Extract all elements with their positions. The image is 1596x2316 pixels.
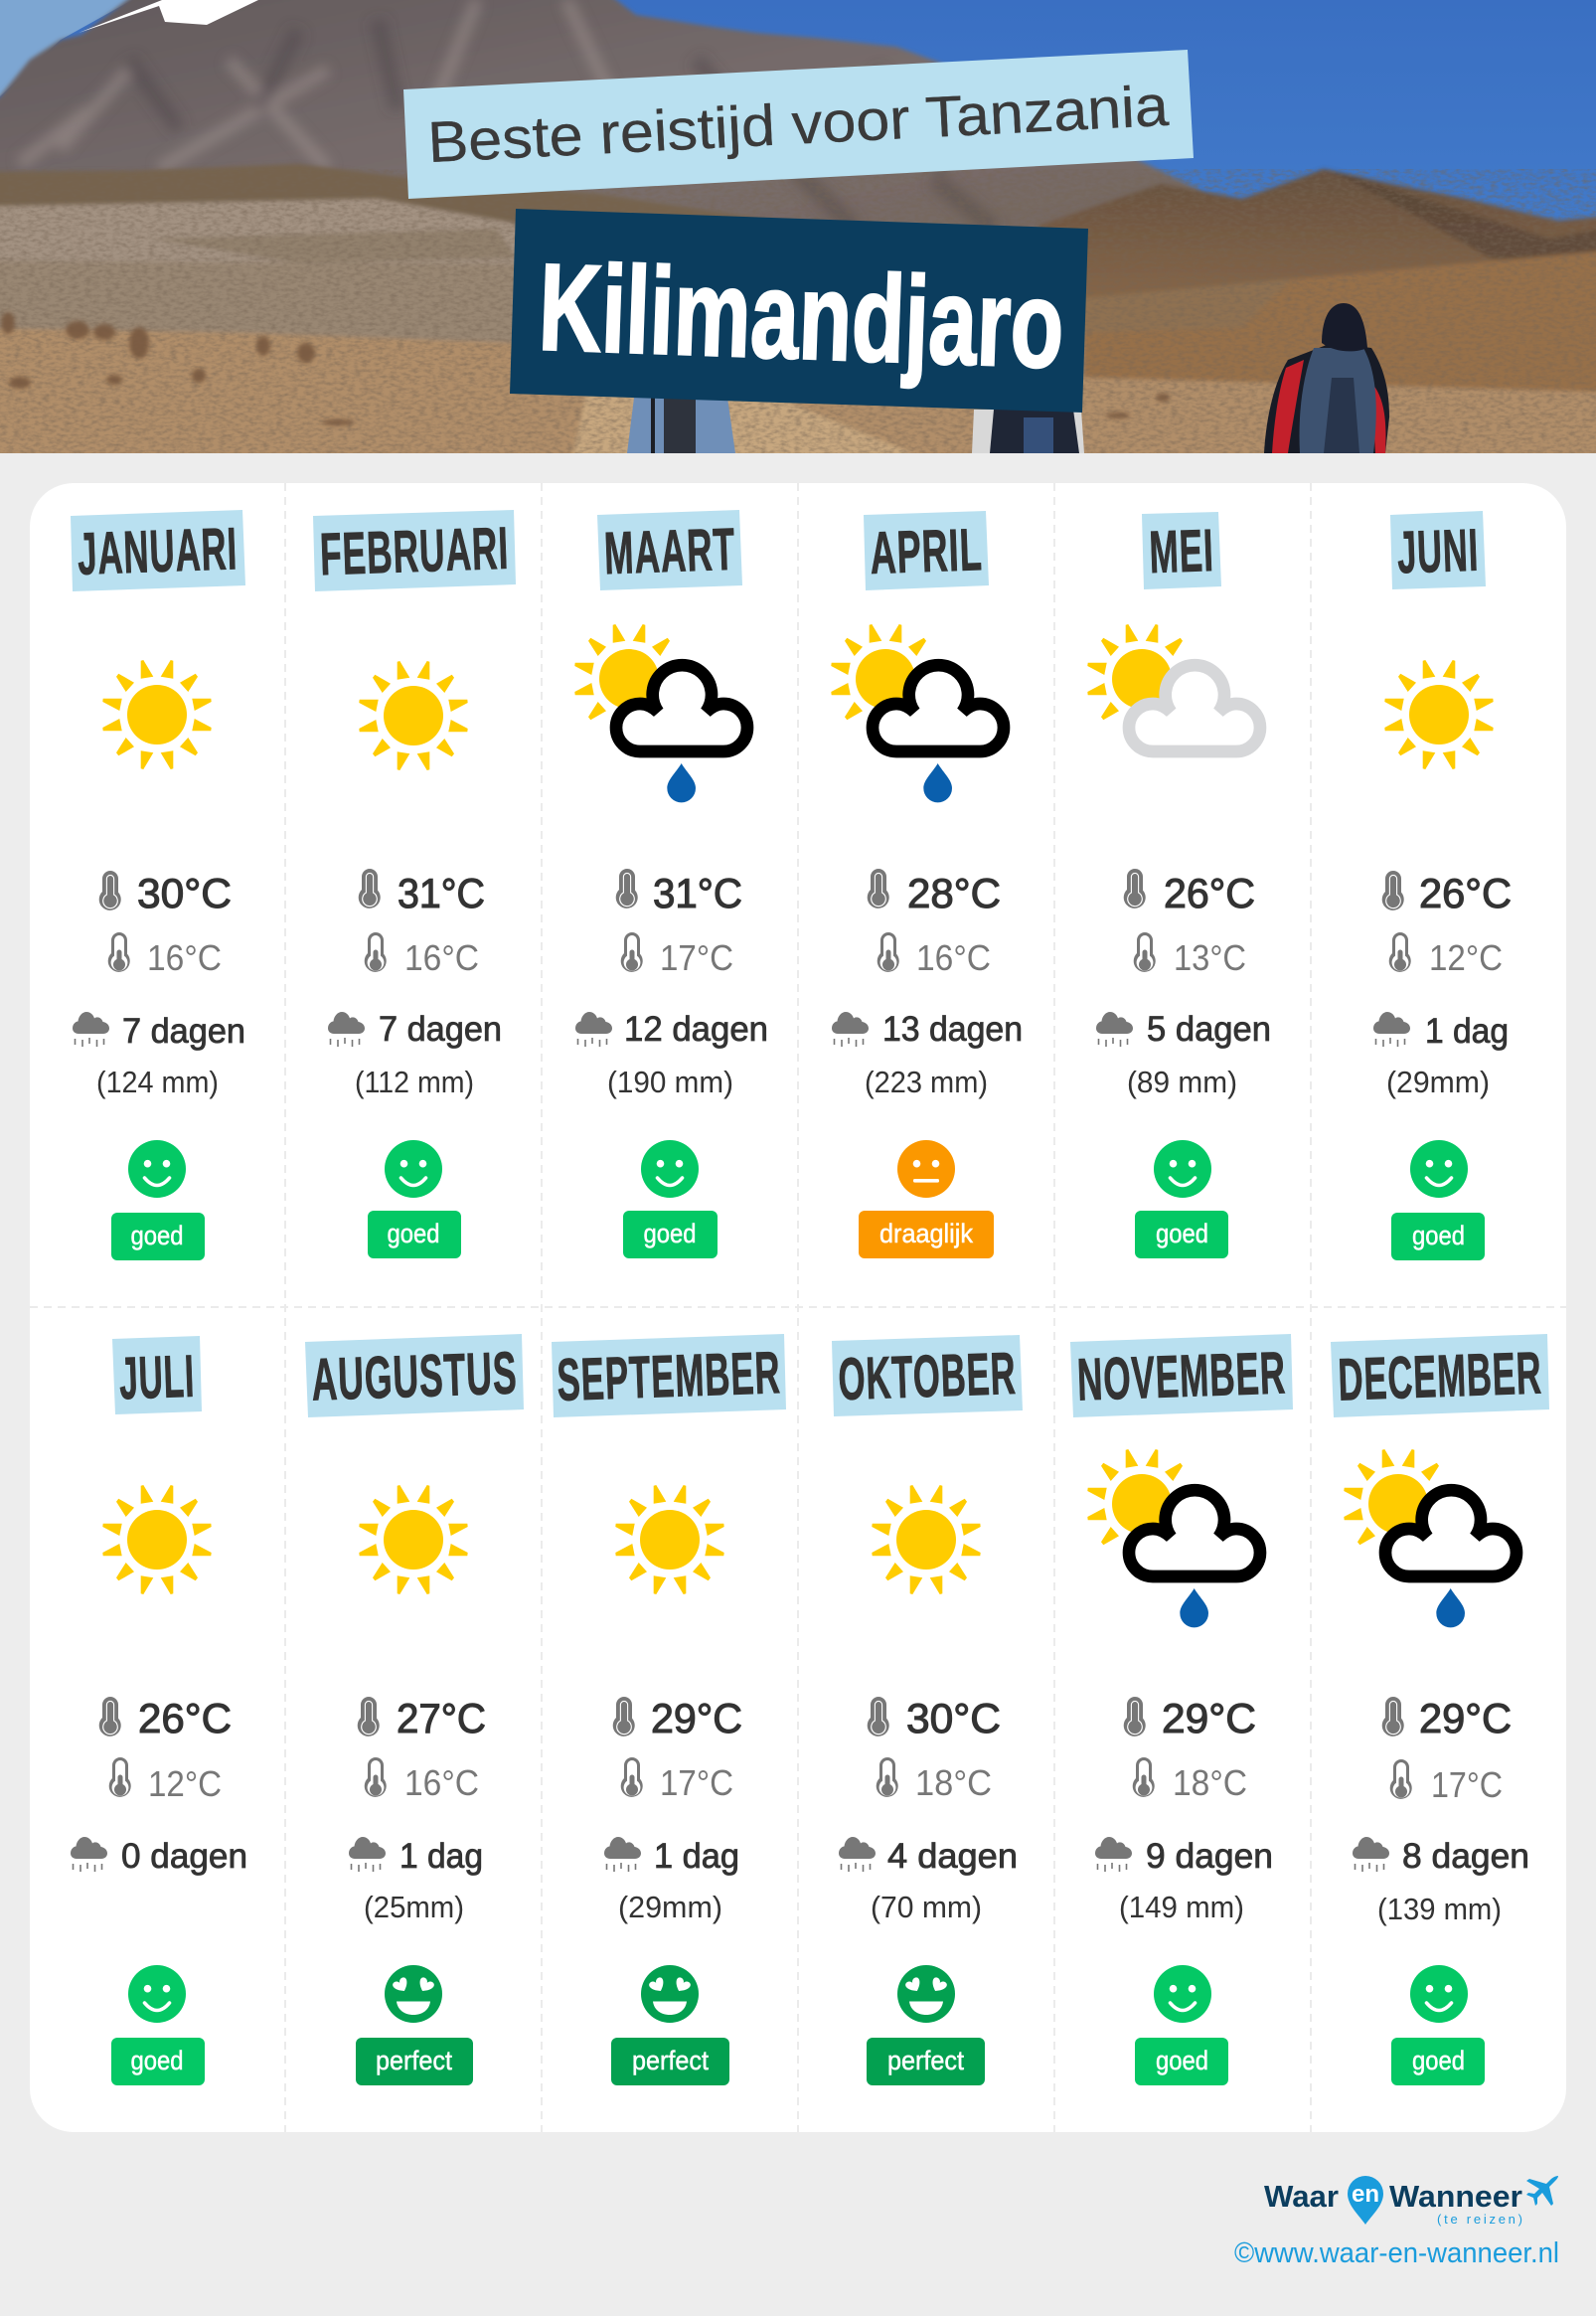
rain days: 9 dagen	[1146, 1837, 1273, 1876]
icon: airplane	[1526, 2176, 1558, 2206]
rain days: 1 dag	[1425, 1012, 1509, 1051]
panel: oktober	[832, 1335, 1023, 2085]
rainfall amount: (70 mm)	[871, 1890, 982, 1924]
month heading: februari	[313, 510, 516, 591]
max temperature: 30°C	[137, 870, 232, 916]
rating badge	[111, 1213, 205, 1260]
rating badge: perfect	[376, 2046, 452, 2075]
month heading: november	[1070, 1334, 1293, 1417]
title banner: Kilimandjaro	[510, 209, 1088, 413]
rating badge: perfect	[632, 2046, 709, 2075]
max temperature: 29°C	[1419, 1695, 1512, 1741]
rating smiley	[1154, 1965, 1211, 2023]
max temperature: 31°C	[398, 870, 485, 916]
rating badge	[1391, 1213, 1485, 1260]
max temperature	[358, 1695, 486, 1741]
min temperature	[621, 932, 733, 978]
min temperature: 13°C	[1174, 937, 1246, 978]
min temperature	[1134, 932, 1246, 978]
panel: maart	[574, 510, 768, 1258]
min temperature: 12°C	[1429, 937, 1503, 978]
rainfall amount: (223 mm)	[865, 1065, 988, 1099]
rain days: 5 dagen	[1147, 1010, 1271, 1049]
max temperature	[359, 869, 485, 916]
weather icon: sun, cloud and rain	[1344, 1449, 1516, 1627]
icon: map pin with en	[1348, 2176, 1383, 2225]
weather icon: sun, cloud and rain	[1087, 1449, 1260, 1627]
min temperature	[1390, 1759, 1503, 1805]
weather icon: sun, cloud and rain	[574, 624, 747, 802]
rain days: 0 dagen	[121, 1837, 247, 1876]
max temperature	[868, 869, 1001, 916]
rating smiley	[897, 1965, 955, 2023]
rain days: 1 dag	[399, 1837, 483, 1876]
month heading: april	[864, 511, 989, 590]
min temperature	[1389, 932, 1503, 978]
month heading: mei: MEI	[1148, 517, 1215, 585]
max temperature: 29°C	[651, 1695, 742, 1741]
weather icon: sun	[102, 1485, 212, 1594]
min temperature	[878, 932, 991, 978]
min temperature: 12°C	[148, 1763, 222, 1804]
max temperature	[616, 869, 742, 916]
max temperature: 27°C	[397, 1695, 486, 1741]
rating badge	[867, 2038, 985, 2085]
rating badge: goed	[1412, 1221, 1465, 1250]
month heading: juli	[112, 1336, 202, 1414]
rain days: 7 dagen	[379, 1010, 502, 1049]
hiker left under title	[627, 398, 735, 453]
hero photo: Kilimanjaro landscape	[0, 0, 1596, 487]
logo: Waar en Wanneer: (te reizen)	[1437, 2212, 1522, 2227]
hiker right with backpack	[1264, 303, 1389, 453]
month heading: maart: MAART	[603, 516, 736, 586]
rain days: 7 dagen	[122, 1012, 245, 1051]
panel: calendar card	[30, 483, 1566, 2132]
max temperature: 26°C	[1419, 870, 1512, 916]
panel: mei	[1087, 512, 1271, 1258]
panel: februari	[313, 510, 516, 1258]
title banner: Kilimandjaro: Kilimandjaro	[537, 239, 1066, 395]
rating smiley	[128, 1965, 186, 2023]
icon: map pin with en: en	[1352, 2181, 1379, 2208]
weather icon: sun	[359, 1485, 468, 1594]
rating smiley	[1154, 1140, 1211, 1198]
max temperature	[1124, 869, 1255, 916]
rating smiley	[641, 1140, 699, 1198]
max temperature: 28°C	[907, 870, 1001, 916]
title banner: Beste reistijd voor Tanzania	[403, 50, 1194, 199]
min temperature	[621, 1757, 733, 1803]
max temperature: 29°C	[1162, 1695, 1256, 1741]
rainfall amount: (149 mm)	[1119, 1890, 1244, 1924]
max temperature	[613, 1695, 742, 1741]
min temperature: 16°C	[404, 1762, 479, 1803]
source url: ©www.waar-en-wanneer.nl	[1234, 2237, 1559, 2269]
rating badge: goed	[1412, 2046, 1465, 2075]
rain days: 12 dagen	[624, 1010, 768, 1049]
min temperature: 18°C	[915, 1762, 992, 1803]
rating badge: goed	[1156, 2046, 1208, 2075]
max temperature: 26°C	[138, 1695, 232, 1741]
rating badge: goed	[131, 1221, 183, 1250]
weather icon: sun	[1384, 660, 1494, 769]
rain days	[328, 1010, 502, 1049]
panel: januari	[71, 510, 245, 1260]
rainfall amount: (124 mm)	[96, 1065, 219, 1099]
min temperature: 16°C	[147, 937, 222, 978]
weather icon: sun	[359, 661, 468, 770]
panel: april	[831, 511, 1023, 1258]
month heading: augustus: AUGUSTUS	[310, 1339, 519, 1413]
month heading: maart	[597, 510, 742, 590]
rating badge: goed	[644, 1219, 696, 1248]
rating badge: goed	[131, 2046, 183, 2075]
rating smiley	[1410, 1965, 1468, 2023]
min temperature	[1133, 1757, 1247, 1803]
max temperature	[868, 1695, 1001, 1741]
month heading: september	[552, 1334, 786, 1417]
weather icon: sun	[872, 1485, 981, 1594]
rating badge	[611, 2038, 729, 2085]
min temperature: 17°C	[660, 937, 733, 978]
hiker middle under title	[972, 410, 1084, 453]
title banner: Beste reistijd voor Tanzania: Beste reistijd voor Tanzania	[426, 74, 1171, 175]
rain days: 13 dagen	[882, 1010, 1023, 1049]
panel: juli	[71, 1336, 247, 2085]
month heading: augustus	[305, 1334, 524, 1417]
month heading: oktober	[832, 1335, 1023, 1416]
rating badge	[1135, 2038, 1228, 2085]
month heading: juni: JUNI	[1396, 517, 1480, 585]
month heading: september: SEPTEMBER	[556, 1339, 782, 1413]
month heading: januari: JANUARI	[77, 515, 239, 587]
max temperature: 26°C	[1164, 870, 1255, 916]
rating badge	[1135, 1211, 1228, 1258]
rating badge	[623, 1211, 718, 1258]
rain days	[1373, 1012, 1509, 1051]
rainfall amount: (89 mm)	[1127, 1065, 1237, 1099]
logo: Waar en Wanneer	[1264, 2176, 1558, 2227]
min temperature: 17°C	[1431, 1764, 1503, 1805]
panel: november	[1070, 1334, 1293, 2085]
min temperature	[109, 1757, 222, 1804]
min temperature	[365, 932, 479, 978]
rain days: 1 dag	[654, 1837, 739, 1876]
rating badge	[111, 2038, 205, 2085]
month heading: november: NOVEMBER	[1076, 1339, 1287, 1413]
logo: Waar en Wanneer: Wanneer	[1389, 2179, 1522, 2214]
panel: juni	[1373, 511, 1512, 1260]
rating smiley	[385, 1140, 442, 1198]
rating badge: perfect	[887, 2046, 964, 2075]
min temperature: 16°C	[404, 937, 479, 978]
rain days	[349, 1837, 483, 1876]
weather icon: sun, cloud and rain	[831, 624, 1004, 802]
rating smiley	[1410, 1140, 1468, 1198]
max temperature: 31°C	[653, 870, 742, 916]
rating badge	[356, 2038, 473, 2085]
min temperature: 17°C	[660, 1762, 733, 1803]
rating badge: goed	[1156, 1219, 1208, 1248]
logo: Waar en Wanneer: Waar	[1264, 2179, 1339, 2214]
rating badge: goed	[388, 1219, 439, 1248]
month heading: oktober: OKTOBER	[837, 1340, 1018, 1412]
weather icon: sun	[102, 660, 212, 769]
month heading: april: APRIL	[869, 516, 984, 586]
month heading: juni	[1390, 511, 1486, 589]
rating badge	[1391, 2038, 1485, 2085]
rain days	[604, 1837, 739, 1876]
min temperature	[365, 1757, 479, 1803]
rainfall amount: (112 mm)	[355, 1065, 474, 1099]
min temperature	[108, 932, 222, 978]
rainfall amount: (25mm)	[364, 1890, 464, 1924]
rating smiley	[128, 1140, 186, 1198]
weather icon: sun	[615, 1485, 724, 1594]
rating smiley	[641, 1965, 699, 2023]
rating badge	[859, 1211, 994, 1258]
panel: december	[1331, 1334, 1549, 2085]
panel: augustus	[305, 1334, 524, 2085]
rainfall amount: (29mm)	[618, 1890, 722, 1924]
min temperature: 16°C	[916, 937, 991, 978]
rainfall amount: (139 mm)	[1377, 1892, 1502, 1926]
max temperature: 30°C	[906, 1695, 1001, 1741]
weather icon: sun and grey cloud	[1087, 624, 1260, 751]
month heading: mei	[1142, 512, 1221, 589]
rain days: 8 dagen	[1402, 1837, 1529, 1876]
rating smiley	[897, 1140, 955, 1198]
rainfall amount: (190 mm)	[607, 1065, 733, 1099]
min temperature	[877, 1757, 992, 1803]
month heading: juli: JULI	[118, 1343, 196, 1411]
rating badge: draaglijk	[879, 1219, 973, 1248]
rain days: 4 dagen	[887, 1837, 1018, 1876]
panel: september	[552, 1334, 786, 2085]
month heading: februari: FEBRUARI	[319, 515, 510, 587]
rainfall amount: (29mm)	[1386, 1065, 1490, 1099]
month heading: januari	[71, 510, 245, 591]
rating smiley	[385, 1965, 442, 2023]
min temperature: 18°C	[1173, 1762, 1247, 1803]
rating badge	[368, 1211, 461, 1258]
